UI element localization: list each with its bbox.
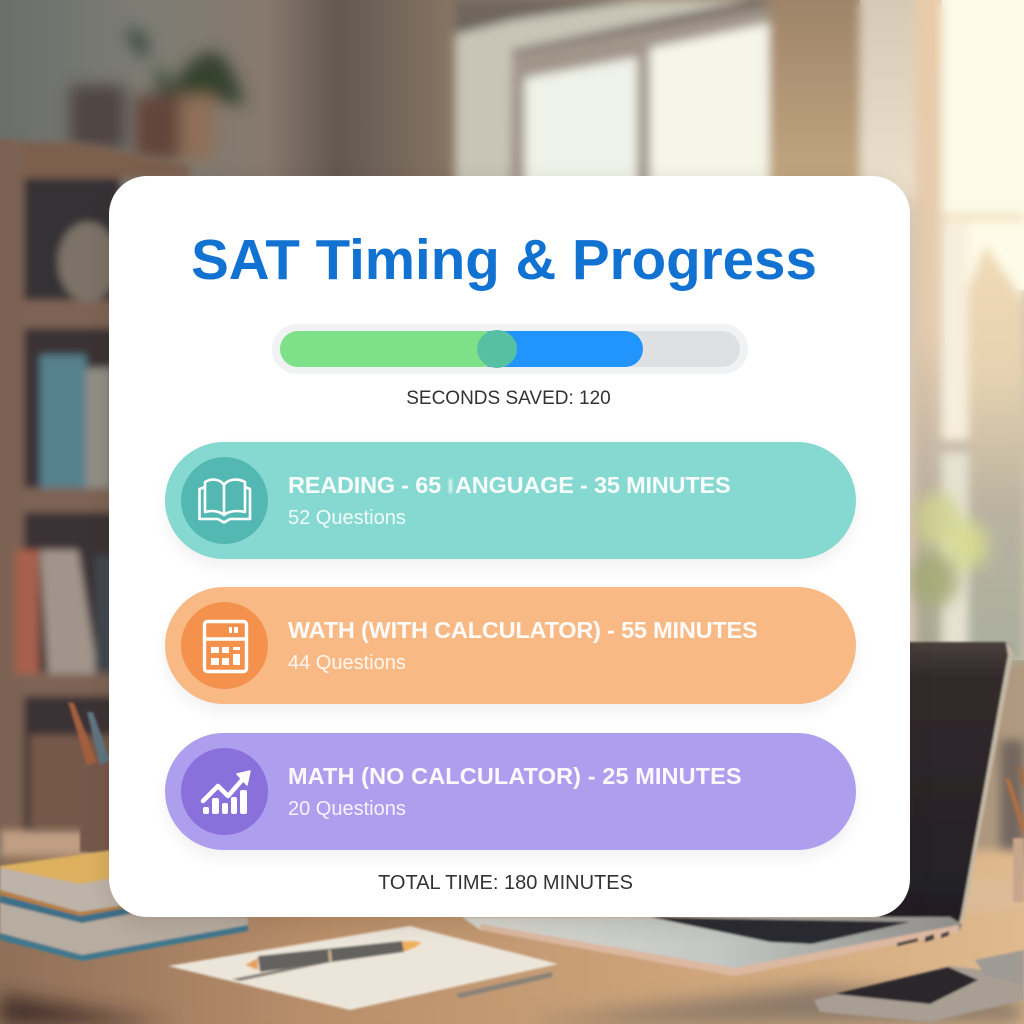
reading heading: READING - 65 ANGUAGE - 35 MINUTES bbox=[288, 472, 730, 498]
math no calculator heading: MATH (NO CALCULATOR) - 25 MINUTES bbox=[288, 763, 742, 789]
desk shadows bbox=[0, 985, 1024, 1024]
title: SAT Timing & Progress bbox=[191, 228, 817, 291]
total time label: TOTAL TIME: 180 MINUTES bbox=[378, 872, 633, 894]
icon: rising chart bbox=[181, 748, 268, 835]
seconds saved label: SECONDS SAVED: 120 bbox=[406, 388, 611, 409]
pill: math no calculator bbox=[165, 733, 856, 850]
progress track bbox=[280, 331, 740, 367]
paper and pencil bbox=[168, 926, 558, 1010]
progress bar bbox=[272, 324, 748, 374]
pill: math with calculator bbox=[165, 587, 856, 704]
card bbox=[109, 176, 910, 917]
right pencils and cup bbox=[1005, 765, 1024, 902]
plant: window greenery bbox=[911, 492, 988, 606]
plant on shelf bbox=[70, 29, 245, 160]
bookshelf bbox=[0, 140, 190, 850]
laptop bbox=[462, 642, 1013, 976]
math with calculator question count: 44 Questions bbox=[288, 652, 406, 674]
overlap knob bbox=[477, 330, 517, 368]
pencil cup bbox=[68, 702, 114, 852]
blue segment bbox=[472, 331, 643, 367]
icon: calculator bbox=[181, 602, 268, 689]
right outdoor haze behind laptop bbox=[1000, 740, 1024, 870]
green segment bbox=[280, 331, 500, 367]
window bbox=[455, 0, 1024, 662]
books bbox=[0, 850, 248, 961]
math with calculator heading: WATH (WITH CALCULATOR) - 55 MINUTES bbox=[288, 617, 757, 643]
reading question count: 52 Questions bbox=[288, 507, 406, 529]
phone bbox=[814, 950, 1024, 1022]
desk bbox=[0, 850, 1024, 1024]
math no calculator question count: 20 Questions bbox=[288, 798, 406, 820]
pill: reading and language bbox=[165, 442, 856, 559]
icon: open book bbox=[181, 457, 268, 544]
